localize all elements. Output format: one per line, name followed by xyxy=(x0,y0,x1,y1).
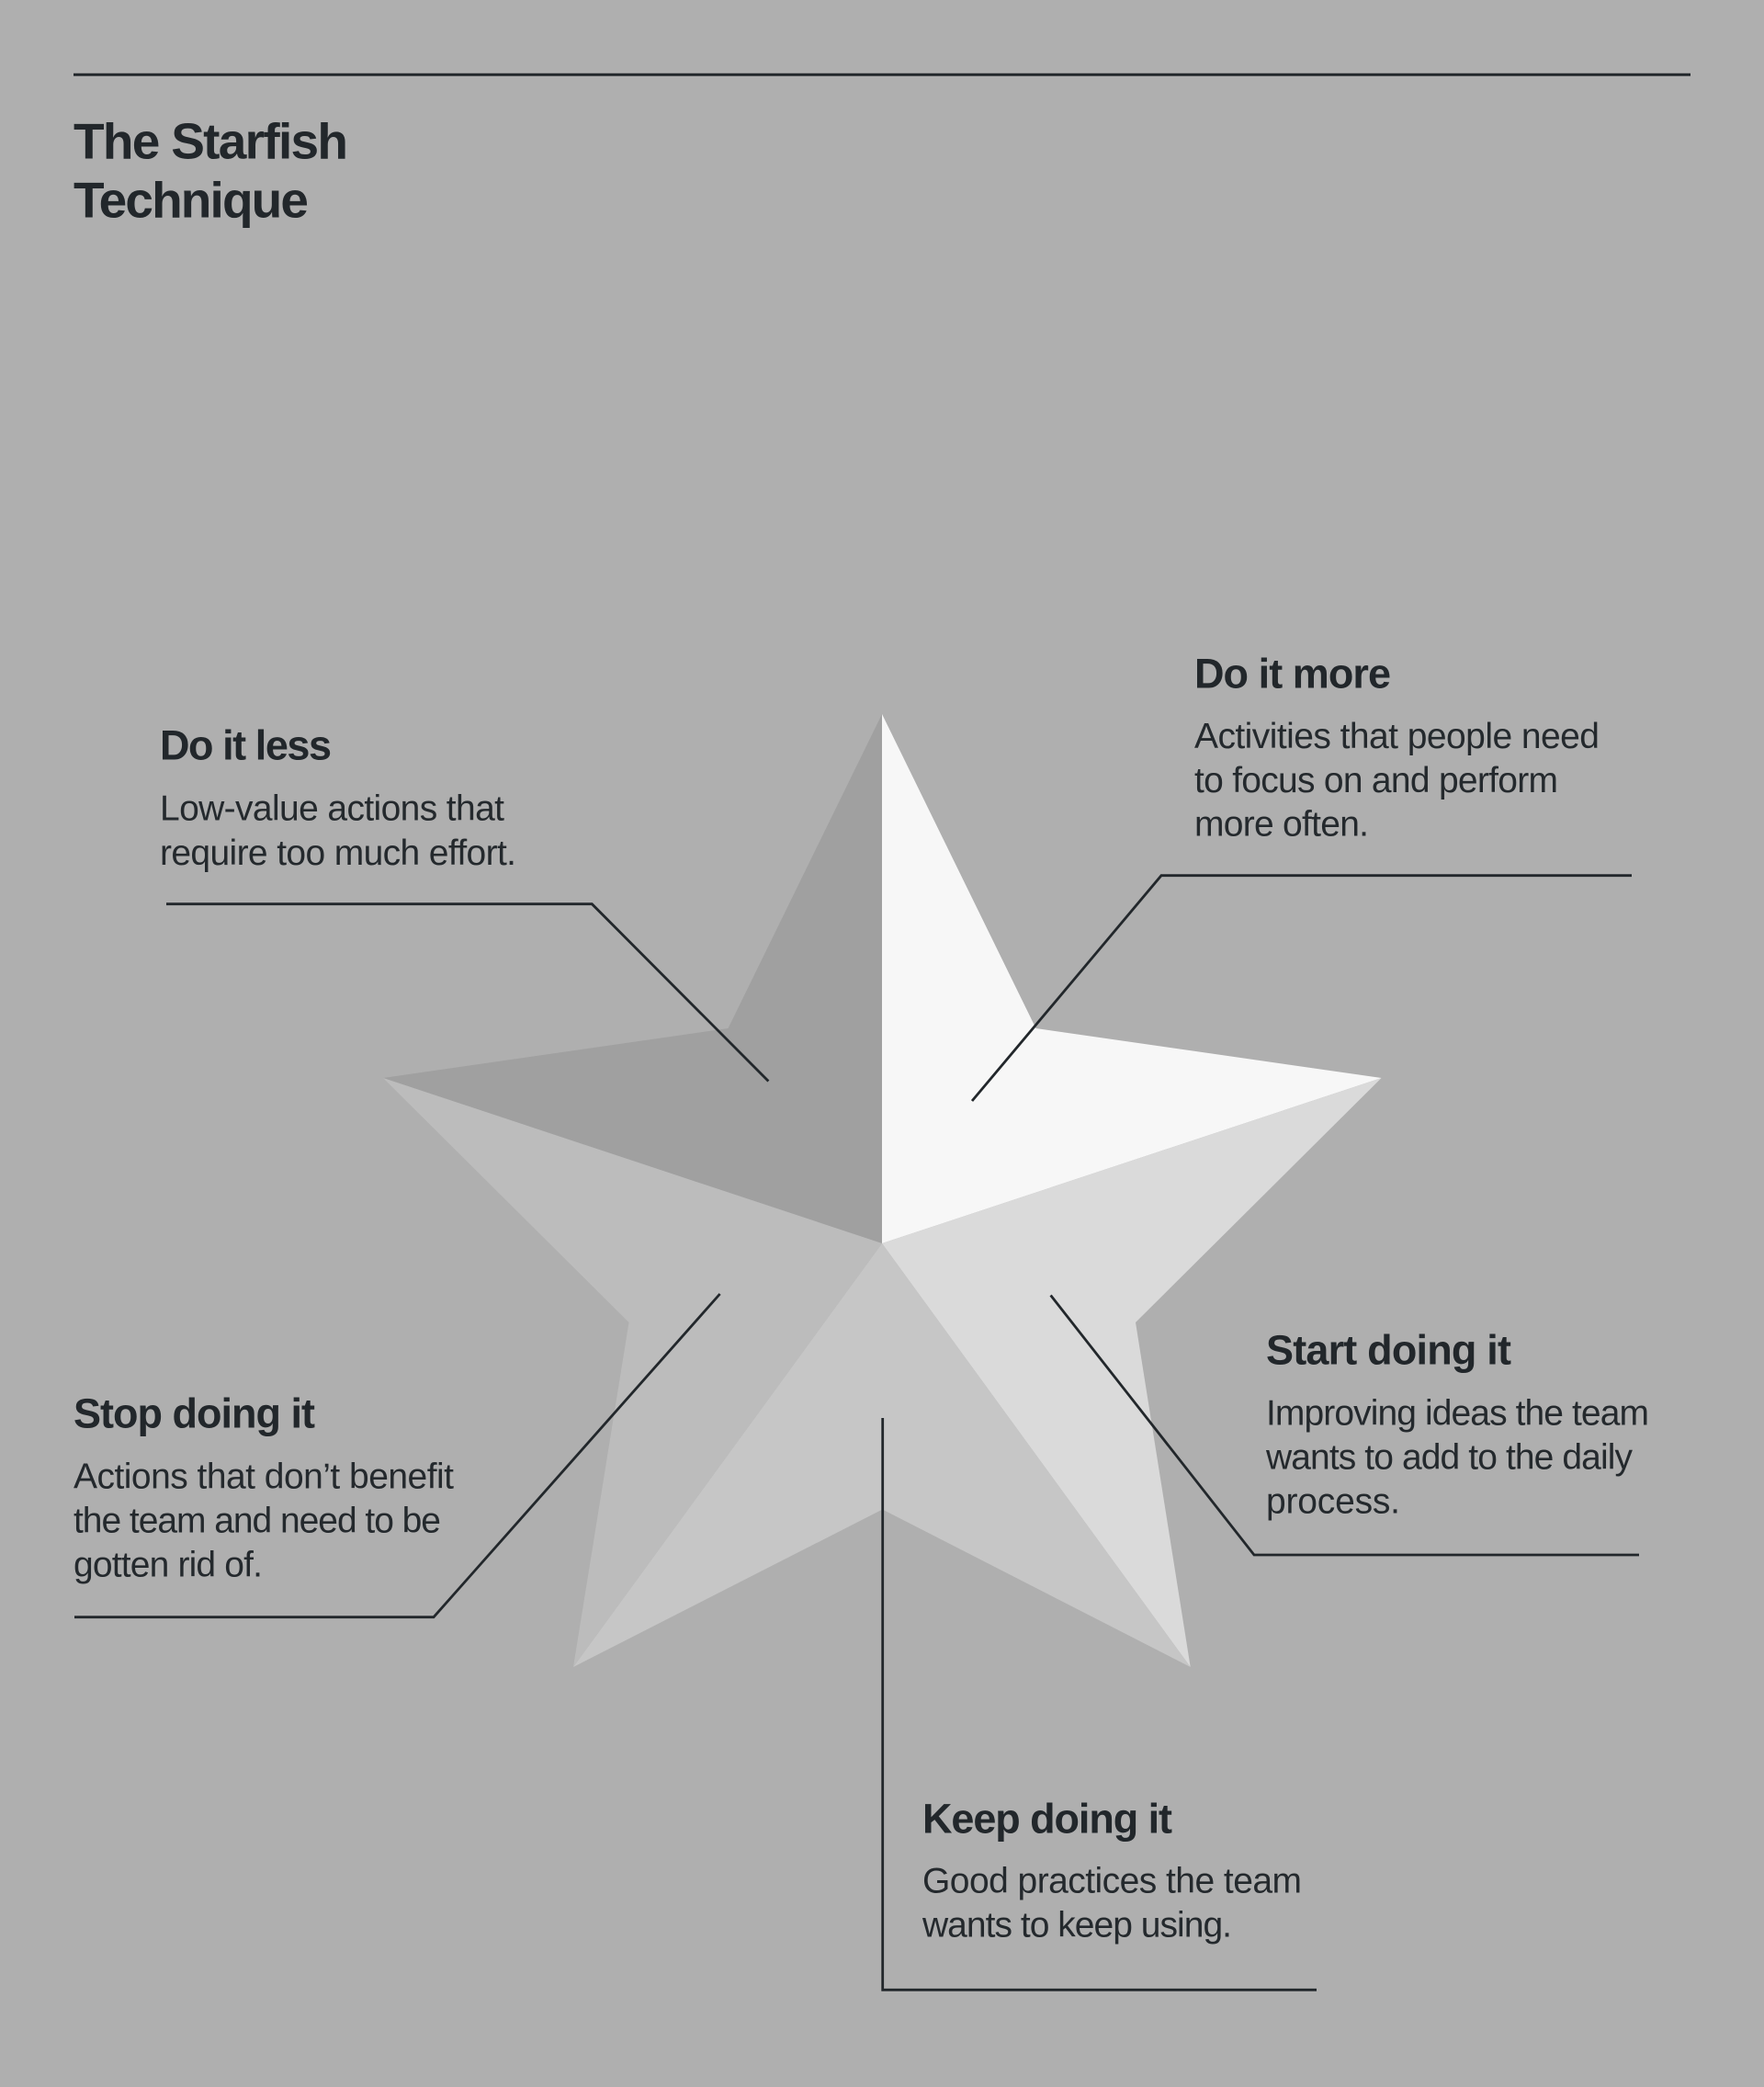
title: The Starfish xyxy=(74,113,348,170)
facet: stop doing it (lower left) xyxy=(383,1078,882,1667)
heading: stop doing it: Stop doing it xyxy=(74,1389,315,1436)
text: stop doing it description xyxy=(74,1457,454,1584)
text: do it more description: to focus on and perform xyxy=(1194,761,1558,800)
heading: keep doing it: Keep doing it xyxy=(922,1796,1172,1843)
panel: keep doing it xyxy=(883,1418,1317,1990)
heading: start doing it: Start doing it xyxy=(1266,1327,1511,1374)
starfish diagram xyxy=(383,714,1382,1667)
panel: start doing it xyxy=(1051,1296,1649,1555)
leader line: do it less xyxy=(166,904,768,1081)
facet: keep doing it (bottom) xyxy=(573,1243,1191,1667)
text: do it less description: Low-value actions that xyxy=(160,789,504,829)
text: keep doing it description xyxy=(922,1861,1302,1945)
text: stop doing it description: gotten rid of. xyxy=(74,1545,263,1584)
facet: start doing it (lower right) xyxy=(882,1078,1382,1667)
text: stop doing it description: the team and need to be xyxy=(74,1501,441,1540)
panel: stop doing it xyxy=(74,1294,720,1617)
leader line: start doing it xyxy=(1051,1296,1639,1555)
text: start doing it description: Improving ideas the team xyxy=(1266,1394,1649,1434)
heading: do it more: Do it more xyxy=(1194,650,1391,697)
text: do it more description: Activities that people need xyxy=(1194,717,1600,756)
facet: do it more (top right) xyxy=(882,714,1382,1243)
leader line: do it more xyxy=(972,876,1632,1101)
leader line: stop doing it xyxy=(74,1294,720,1617)
text: start doing it description: process. xyxy=(1266,1482,1400,1522)
text: do it more description: more often. xyxy=(1194,804,1369,844)
leader line: keep doing it xyxy=(883,1418,1317,1990)
facet: do it less (top left) xyxy=(383,714,882,1243)
text: do it less description: require too much effort. xyxy=(160,834,516,873)
text: keep doing it description: Good practices the team xyxy=(922,1861,1302,1900)
text: start doing it description xyxy=(1265,1394,1649,1522)
panel: do it less xyxy=(160,722,768,1081)
title xyxy=(74,113,348,229)
text: do it more description xyxy=(1194,717,1600,844)
text: keep doing it description: wants to keep using. xyxy=(922,1905,1232,1945)
text: do it less description xyxy=(160,789,516,873)
panel: do it more xyxy=(972,650,1632,1101)
heading: do it less: Do it less xyxy=(160,722,332,769)
text: start doing it description: wants to add to the daily xyxy=(1265,1438,1634,1478)
title: Technique xyxy=(74,172,309,229)
text: stop doing it description: Actions that don’t benefit xyxy=(74,1457,454,1496)
